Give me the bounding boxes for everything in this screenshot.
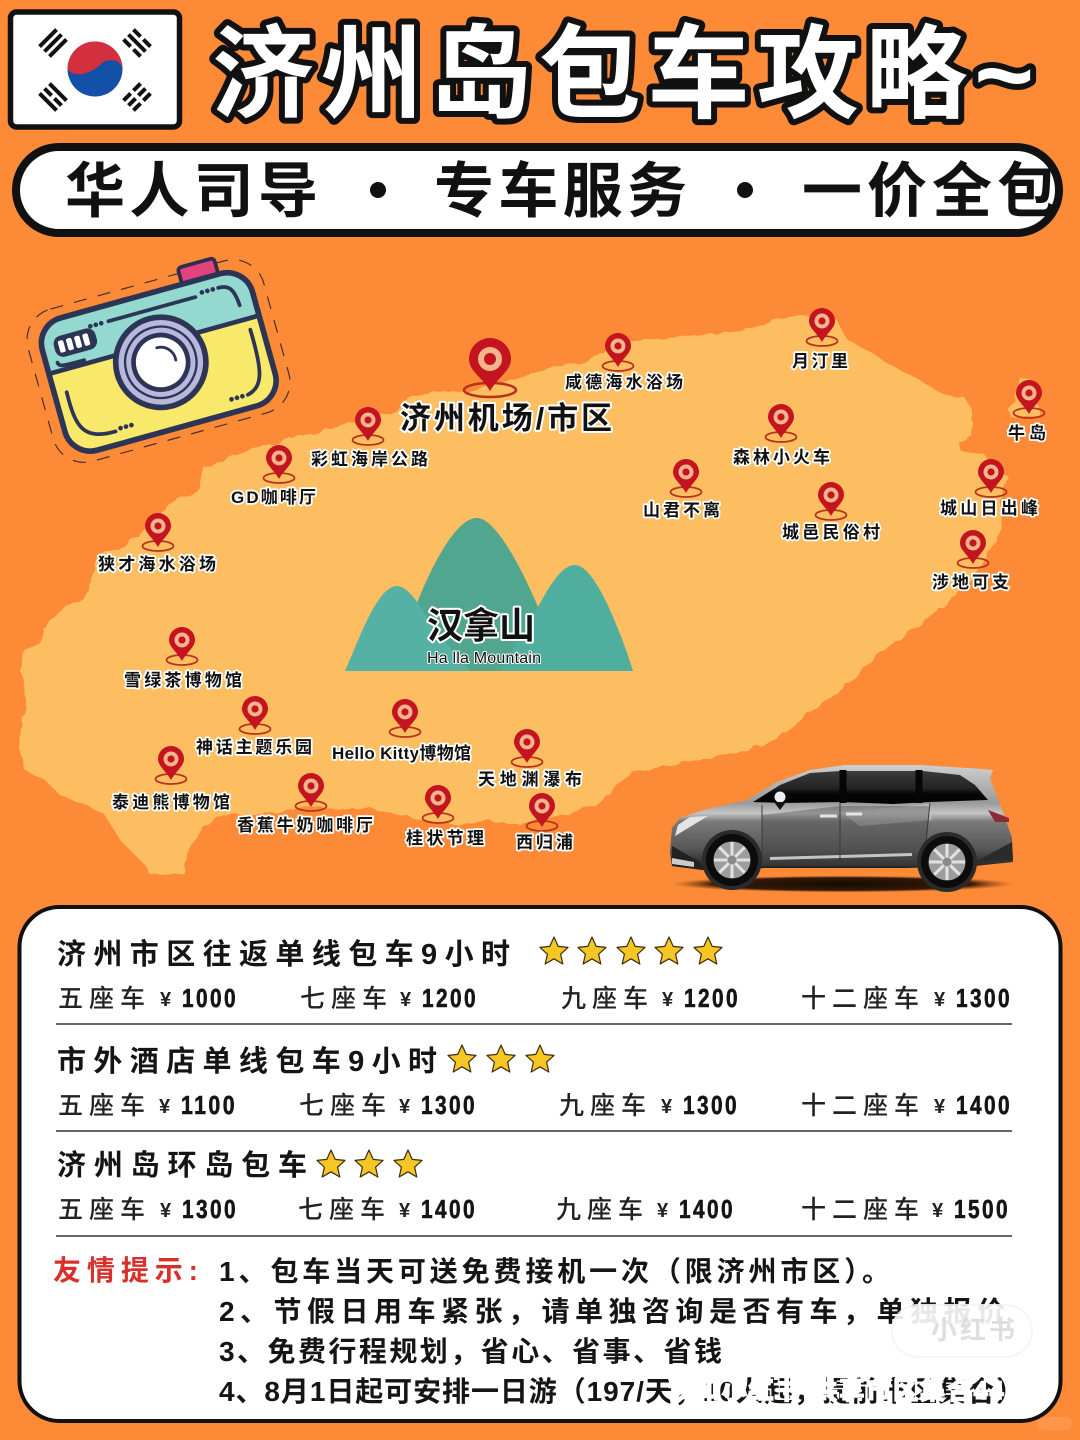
- tips heading: 友情提示:: [53, 1255, 198, 1286]
- prices: route three: ¥: [399, 1200, 411, 1222]
- prices: route two: ¥: [399, 1096, 411, 1118]
- prices: route three: ¥: [160, 1200, 172, 1222]
- route heading: city round trip: 济州市区往返单线包车 9 小时: [57, 938, 510, 971]
- prices: route one: 十二座车: [801, 979, 925, 1015]
- prices: route one: ¥: [160, 989, 172, 1011]
- route heading: suburban hotel: 市外酒店单线包车 9 小时: [57, 1045, 437, 1078]
- prices: route two: 五座车: [58, 1086, 151, 1122]
- route heading: island loop: 济州岛环岛包车: [57, 1149, 307, 1182]
- marker: Hello Kitty museum: [332, 699, 471, 763]
- panel: pricing: [20, 907, 1060, 1421]
- marker: Shinhwa theme park: 神话主题乐园: [196, 738, 312, 757]
- marker: teddy bear museum: [112, 746, 230, 812]
- marker: banana milk cafe: [237, 773, 373, 835]
- marker: Jeju airport: [400, 338, 612, 436]
- marker: banana milk cafe: 香蕉牛奶咖啡厅: [237, 816, 373, 835]
- prices: route two: 1100: [181, 1090, 237, 1120]
- marker: rainbow coast road: 彩虹海岸公路: [311, 449, 428, 469]
- marker: Sangumburi: 山君不离: [643, 500, 720, 520]
- illustration: grey van: [670, 765, 1015, 892]
- watermark: 小红书: [931, 1315, 1015, 1345]
- marker: Seongsan Ilchulbong: 城山日出峰: [940, 498, 1038, 518]
- rating: three stars: [448, 1045, 554, 1072]
- marker: Hello Kitty museum: Hello Kitty博物馆: [332, 743, 471, 763]
- tips list: 4、8月1日起可安排一日游（197/天，10人起，提前市区集合）: [219, 1370, 1024, 1410]
- marker: Jusangjeolli: 桂状节理: [406, 829, 484, 848]
- prices: route two: 1300: [421, 1090, 477, 1120]
- marker: Cheonjiyeon falls: 天地渊瀑布: [478, 770, 582, 789]
- title: 济州岛包车攻略~: [212, 18, 1034, 132]
- prices: route one: 1200: [422, 983, 478, 1013]
- marker: rainbow coast road: [311, 407, 428, 469]
- marker: Seogwipo: 西归浦: [516, 832, 573, 852]
- tips list: 1、包车当天可送免费接机一次（限济州市区）。: [219, 1250, 890, 1290]
- marker: Woljeong-ri: [792, 308, 848, 371]
- prices: route one: 1200: [684, 983, 740, 1013]
- marker: Jusangjeolli: [406, 785, 484, 848]
- prices: route three: 1400: [679, 1194, 735, 1224]
- tips list: [219, 1250, 1024, 1410]
- prices: route one: 五座车: [58, 979, 151, 1015]
- prices: route two: [58, 1086, 1012, 1122]
- watermark: 我和小红书:共享市区集合4421: [668, 1377, 1035, 1405]
- marker: Seopjikoji: [932, 530, 1009, 592]
- marker: Shinhwa theme park: [196, 696, 312, 757]
- prices: route three: 十二座车: [801, 1190, 925, 1226]
- icon: camera: [18, 247, 297, 470]
- tips list: 2、节假日用车紧张，请单独咨询是否有车，单独报价: [219, 1290, 1005, 1330]
- label: Halla Mountain: Ha lla Mountain: [427, 650, 541, 667]
- watermark: [668, 1305, 1072, 1430]
- marker: Jeju airport: 济州机场/市区: [400, 401, 612, 436]
- marker: teddy bear museum: 泰迪熊博物馆: [112, 792, 230, 812]
- prices: route one: ¥: [934, 989, 946, 1011]
- marker: Sangumburi: [643, 459, 720, 520]
- prices: route two: ¥: [159, 1096, 171, 1118]
- prices: route three: [58, 1190, 1010, 1226]
- marker: Hyeopjae beach: [98, 513, 216, 574]
- marker: O'sulloc tea museum: 雪绿茶博物馆: [124, 670, 242, 690]
- marker: Hamdeok: [565, 333, 683, 392]
- subtitle banner: 专车服务: [434, 158, 687, 225]
- prices: route two: 七座车: [299, 1086, 392, 1122]
- prices: route three: ¥: [657, 1200, 669, 1222]
- prices: route two: 十二座车: [801, 1086, 925, 1122]
- marker: Seongeup folk village: 城邑民俗村: [782, 522, 880, 542]
- marker: forest train: [733, 404, 830, 467]
- subtitle banner: [16, 147, 1059, 233]
- prices: route three: 1300: [182, 1194, 238, 1224]
- marker: Seogwipo: [516, 793, 573, 852]
- rating: three stars: [317, 1150, 422, 1177]
- marker: GD cafe: [231, 445, 316, 507]
- illustration: Halla mountain: [345, 518, 633, 671]
- prices: route two: ¥: [934, 1096, 946, 1118]
- prices: route one: 1300: [956, 983, 1012, 1013]
- subtitle banner: 华人司导: [65, 158, 318, 225]
- prices: route two: 九座车: [559, 1086, 652, 1122]
- marker: Seongsan Ilchulbong: [940, 459, 1038, 518]
- prices: route one: 七座车: [300, 979, 393, 1015]
- map: Jeju island: [17, 315, 1040, 875]
- icon: Korean flag: [10, 12, 180, 127]
- marker: Hyeopjae beach: 狭才海水浴场: [98, 555, 216, 574]
- marker: Seongeup folk village: [782, 482, 880, 542]
- marker: forest train: 森林小火车: [733, 447, 830, 467]
- marker: Woljeong-ri: 月汀里: [792, 352, 848, 371]
- marker: O'sulloc tea museum: [124, 627, 242, 690]
- tips list: 3、免费行程规划，省心、省事、省钱: [219, 1330, 722, 1370]
- prices: route three: 七座车: [298, 1190, 391, 1226]
- label: Hallasan: 汉拿山: [427, 605, 535, 646]
- prices: route one: ¥: [662, 989, 674, 1011]
- prices: route one: 九座车: [561, 979, 654, 1015]
- marker: Cheonjiyeon falls: [478, 729, 582, 789]
- prices: route one: [58, 979, 1012, 1015]
- subtitle banner: 一价全包: [802, 158, 1057, 225]
- prices: route two: 1400: [956, 1090, 1012, 1120]
- prices: route one: ¥: [400, 989, 412, 1011]
- prices: route one: 1000: [182, 983, 238, 1013]
- prices: route three: ¥: [932, 1200, 944, 1222]
- prices: route three: 五座车: [58, 1190, 151, 1226]
- prices: route two: 1300: [683, 1090, 739, 1120]
- marker: Hamdeok: 咸德海水浴场: [565, 373, 683, 392]
- marker: Udo: [1008, 380, 1046, 443]
- marker: Udo: 牛岛: [1008, 423, 1046, 443]
- marker: GD cafe: GD咖啡厅: [231, 488, 316, 507]
- prices: route three: 九座车: [556, 1190, 649, 1226]
- prices: route three: 1400: [421, 1194, 477, 1224]
- rating: five stars: [540, 937, 722, 964]
- marker: Seopjikoji: 涉地可支: [932, 572, 1009, 592]
- prices: route three: 1500: [954, 1194, 1010, 1224]
- prices: route two: ¥: [661, 1096, 673, 1118]
